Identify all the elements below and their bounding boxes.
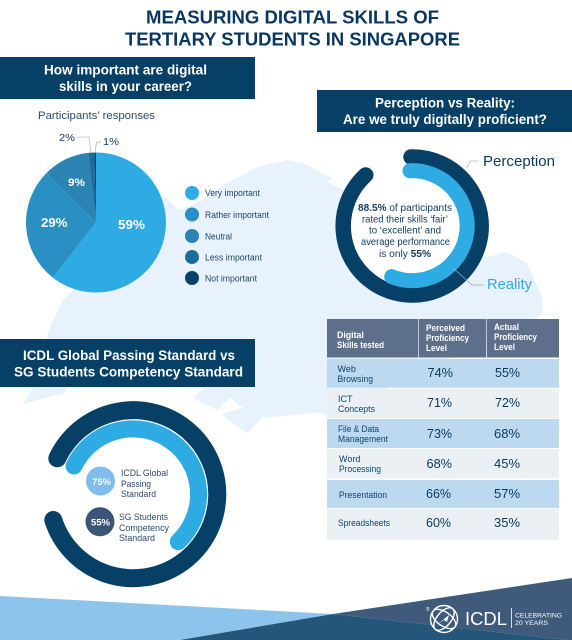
- heading: how important: How important are digital: [44, 62, 207, 78]
- table header: [327, 319, 559, 358]
- badge: SG students 55%: 55%: [91, 518, 110, 528]
- badge: SG students 55%: Standard: [119, 532, 155, 543]
- badge: ICDL 75%: [86, 466, 168, 499]
- badge: ICDL 75%: ICDL Global: [121, 467, 168, 478]
- badge: SG students 55%: Competency: [119, 522, 169, 533]
- heading: perception vs reality: [317, 90, 572, 132]
- title: TERTIARY STUDENTS IN SINGAPORE: [125, 28, 460, 50]
- ring chart: standards: [53, 410, 217, 578]
- ring centre text: average performance: [361, 237, 450, 248]
- badge: SG students 55%: [86, 507, 169, 543]
- heading: how important: skills in your career?: [59, 79, 192, 94]
- ring chart: perception and reality: [343, 157, 481, 295]
- table header: Proficiency: [426, 333, 469, 343]
- row: web browsing: 74%: [428, 365, 453, 380]
- row: presentation: 66%: [426, 486, 451, 501]
- row: ICT concepts: 72%: [495, 395, 520, 410]
- label: reality: Reality: [487, 276, 532, 293]
- ring centre text: rated their skills ‘fair’: [362, 214, 448, 226]
- row: web browsing: Web: [338, 364, 356, 374]
- title: MEASURING DIGITAL SKILLS OF: [146, 6, 439, 28]
- heading: ICDL vs SG: SG Students Competency Standard: [14, 364, 243, 380]
- ring centre text: [358, 203, 452, 260]
- chart subtitle: Participants’ responses: [38, 110, 155, 122]
- legend: Rather important: [205, 210, 270, 220]
- heading: how important: [0, 57, 255, 99]
- row: file and data management: 73%: [427, 426, 452, 441]
- row: presentation: [327, 480, 559, 508]
- logo: ICDL celebrating 20 years: [426, 604, 562, 634]
- heading: perception vs reality: Perception vs Reality:: [375, 96, 515, 110]
- table header: Perceived: [426, 323, 465, 333]
- row: ICT concepts: ICT: [338, 394, 353, 404]
- row: ICT concepts: [327, 389, 559, 418]
- logo: ICDL celebrating 20 years: 20 YEARS: [515, 620, 548, 627]
- pie chart: [26, 133, 166, 292]
- row: spreadsheets: 35%: [494, 515, 520, 530]
- label: reality: [453, 268, 532, 293]
- row: word processing: 68%: [426, 456, 452, 471]
- table header: Proficiency: [494, 332, 537, 342]
- heading: perception vs reality: Are we truly digitally proficient?: [343, 112, 547, 127]
- heading: ICDL vs SG: ICDL Global Passing Standard vs: [23, 348, 235, 363]
- row: word processing: 45%: [494, 456, 520, 471]
- row: word processing: Word: [339, 454, 360, 464]
- pie chart: 2%: [59, 133, 75, 144]
- row: word processing: [327, 449, 559, 478]
- row: web browsing: 55%: [495, 365, 520, 380]
- table header: Digital: [337, 330, 364, 340]
- badge: ICDL 75%: Passing: [121, 478, 151, 489]
- table header: Actual: [494, 322, 519, 332]
- bottom decorative band: [0, 578, 572, 640]
- row: spreadsheets: Spreadsheets: [338, 518, 390, 528]
- row: presentation: Presentation: [339, 490, 387, 500]
- heading: ICDL vs SG: [0, 339, 255, 387]
- row: file and data management: File & Data: [338, 424, 379, 434]
- row: file and data management: Management: [338, 434, 388, 444]
- ring centre text: is only 55%: [379, 249, 431, 260]
- pie chart: 9%: [68, 177, 85, 189]
- pie chart: 59%: [118, 218, 145, 232]
- logo: ICDL celebrating 20 years: ®: [426, 606, 430, 613]
- pie chart: 29%: [41, 216, 68, 230]
- row: ICT concepts: 71%: [427, 395, 452, 410]
- ring centre text: 88.5% of participants: [358, 203, 452, 214]
- row: file and data management: [327, 419, 559, 448]
- title: [125, 6, 460, 50]
- legend: Neutral: [205, 232, 232, 242]
- row: spreadsheets: 60%: [426, 515, 451, 530]
- row: ICT concepts: Concepts: [338, 404, 375, 414]
- logo: ICDL celebrating 20 years: CELEBRATING: [515, 612, 562, 620]
- legend: [185, 186, 270, 285]
- row: spreadsheets: [327, 509, 559, 540]
- logo: ICDL celebrating 20 years: ICDL: [465, 608, 507, 629]
- panel: perception vs reality: [317, 90, 572, 295]
- badge: SG students 55%: SG Students: [119, 511, 168, 522]
- ring centre text: to ‘excellent’ and: [369, 226, 441, 236]
- legend: Not important: [205, 274, 258, 284]
- pie chart: 1%: [103, 137, 119, 148]
- row: word processing: Processing: [339, 464, 381, 474]
- legend: Very important: [205, 188, 261, 198]
- row: web browsing: [327, 359, 559, 388]
- row: web browsing: Browsing: [338, 374, 373, 384]
- table header: Level: [426, 343, 447, 353]
- table: perceived vs actual proficiency: [327, 319, 559, 540]
- panel: career importance: [0, 57, 270, 292]
- badge: ICDL 75%: 75%: [92, 477, 111, 487]
- row: file and data management: 68%: [494, 426, 520, 441]
- table header: Skills tested: [337, 340, 384, 350]
- row: presentation: 57%: [494, 486, 520, 501]
- badge: ICDL 75%: Standard: [121, 488, 156, 499]
- label: perception: Perception: [483, 153, 555, 170]
- legend: Less important: [205, 252, 263, 262]
- panel: ICDL standard vs SG students: [0, 339, 255, 578]
- icon: ICDL globe: [429, 604, 459, 634]
- table header: Level: [494, 342, 515, 352]
- background map of Singapore: [23, 160, 543, 433]
